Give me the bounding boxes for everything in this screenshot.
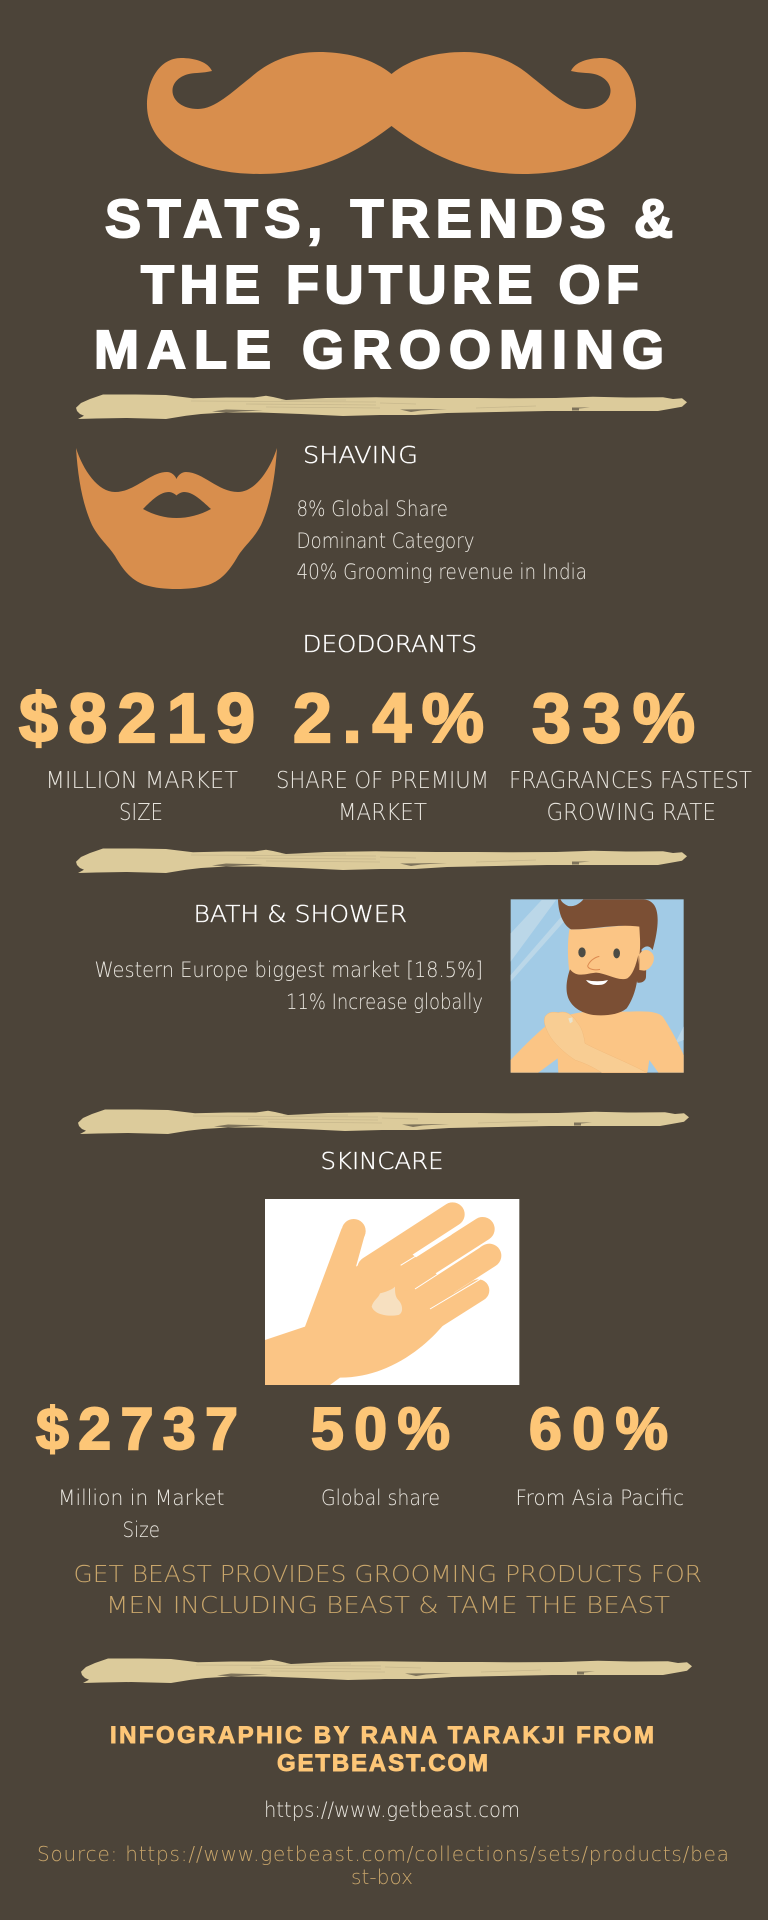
stat labels: skincare: From Asia Pacific bbox=[516, 1486, 684, 1510]
stat labels: skincare: Global share bbox=[321, 1486, 440, 1510]
panel: bath and shower bbox=[94, 899, 684, 1073]
stat numbers: deodorants: $8219 bbox=[19, 679, 255, 757]
stat labels: deodorants: FRAGRANCES FASTEST bbox=[509, 768, 752, 794]
stat labels: deodorants bbox=[46, 768, 752, 826]
heading: skincare: SKINCARE bbox=[320, 1149, 444, 1175]
credit heading: INFOGRAPHIC BY RANA TARAKJI FROM bbox=[110, 1722, 654, 1749]
stat labels: deodorants: MILLION MARKET bbox=[46, 768, 238, 794]
panel: deodorants bbox=[19, 632, 752, 826]
shaving stats: Dominant Category bbox=[296, 529, 474, 553]
stat labels: skincare: Million in Market bbox=[58, 1486, 224, 1510]
divider: brush stroke 3 bbox=[78, 1110, 689, 1134]
title: STATS, TRENDS & bbox=[105, 189, 673, 249]
icon: bearded man applying lotion bbox=[511, 899, 684, 1073]
stat labels: deodorants: GROWING RATE bbox=[546, 800, 716, 826]
shaving stats: 8% Global Share bbox=[296, 497, 448, 521]
callout: get beast products: GET BEAST PROVIDES GROOMING PRODUCTS FOR bbox=[74, 1562, 702, 1588]
title: THE FUTURE OF bbox=[141, 255, 639, 315]
stat labels: deodorants: SIZE bbox=[119, 800, 163, 826]
stat numbers: deodorants: 33% bbox=[532, 679, 695, 757]
divider: brush stroke 4 bbox=[81, 1658, 692, 1683]
heading: deodorants: DEODORANTS bbox=[302, 632, 477, 658]
bath and shower stats bbox=[94, 958, 483, 1014]
stat numbers: deodorants: 2.4% bbox=[293, 679, 484, 757]
source line: st-box bbox=[351, 1865, 413, 1889]
credit heading bbox=[110, 1722, 654, 1777]
shaving stats: 40% Grooming revenue in India bbox=[296, 560, 587, 584]
website link: https://www.getbeast.com bbox=[264, 1798, 520, 1822]
icon: beard bbox=[76, 448, 277, 589]
stat numbers: skincare: 50% bbox=[311, 1396, 450, 1462]
stat numbers: skincare: $2737 bbox=[36, 1396, 238, 1462]
stat labels: deodorants: SHARE OF PREMIUM bbox=[276, 768, 489, 794]
icon: mustache bbox=[147, 52, 636, 174]
panel: skincare bbox=[36, 1149, 684, 1542]
bath and shower stats: 11% Increase globally bbox=[286, 990, 483, 1014]
shaving stats bbox=[296, 497, 587, 584]
stat labels: skincare bbox=[58, 1486, 684, 1542]
heading: shaving: SHAVING bbox=[303, 443, 418, 469]
icon: hand with cream bbox=[265, 1199, 519, 1385]
divider: brush stroke 1 bbox=[76, 394, 687, 419]
source line bbox=[37, 1842, 729, 1889]
stat numbers: skincare bbox=[36, 1396, 668, 1462]
credit heading: GETBEAST.COM bbox=[277, 1750, 488, 1777]
callout: get beast products bbox=[74, 1562, 702, 1619]
stat numbers: deodorants bbox=[19, 679, 695, 757]
divider: brush stroke 2 bbox=[76, 848, 687, 873]
title bbox=[94, 189, 673, 380]
panel: shaving bbox=[76, 443, 587, 589]
title: MALE GROOMING bbox=[94, 320, 664, 380]
bath and shower stats: Western Europe biggest market [18.5%] bbox=[94, 958, 483, 982]
stat numbers: skincare: 60% bbox=[529, 1396, 668, 1462]
heading: bath and shower: BATH & SHOWER bbox=[194, 902, 407, 928]
source line: Source: https://www.getbeast.com/collections/sets/products/bea bbox=[37, 1842, 729, 1866]
stat labels: skincare: Size bbox=[122, 1518, 160, 1542]
callout: get beast products: MEN INCLUDING BEAST & TAME THE BEAST bbox=[106, 1593, 670, 1619]
stat labels: deodorants: MARKET bbox=[338, 800, 427, 826]
